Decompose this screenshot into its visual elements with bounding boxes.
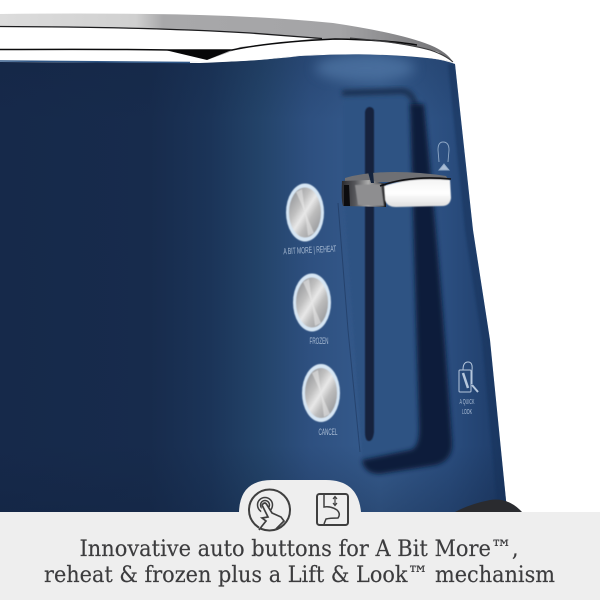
caption text <box>44 536 555 588</box>
caption text: Innovative auto buttons for A Bit More™, <box>80 536 518 562</box>
icon tab <box>239 480 361 512</box>
toaster body <box>0 50 520 515</box>
chrome lid <box>0 14 453 62</box>
bread slot <box>365 107 374 441</box>
button: cancel <box>302 364 340 422</box>
lever handle <box>342 172 451 207</box>
caption text: reheat & frozen plus a Lift & Look™ mechanism <box>44 562 555 588</box>
button: frozen <box>293 274 331 332</box>
label: cancel: CANCEL <box>318 427 338 437</box>
slider recess <box>342 91 452 474</box>
icon: toast lift <box>438 142 449 170</box>
icon: quick look <box>459 362 478 392</box>
side panel seam <box>338 203 360 452</box>
text: A QUICK <box>460 397 474 406</box>
icon: touch button <box>249 490 290 530</box>
feet <box>455 500 522 512</box>
button: a bit more <box>286 184 324 242</box>
caption band <box>0 512 600 600</box>
label: frozen: FROZEN <box>310 336 328 346</box>
label: a quick look: LOOK <box>462 407 472 416</box>
icon: lift and look <box>317 494 348 525</box>
label: a bit more reheat: A BIT MORE | REHEAT <box>283 244 337 256</box>
